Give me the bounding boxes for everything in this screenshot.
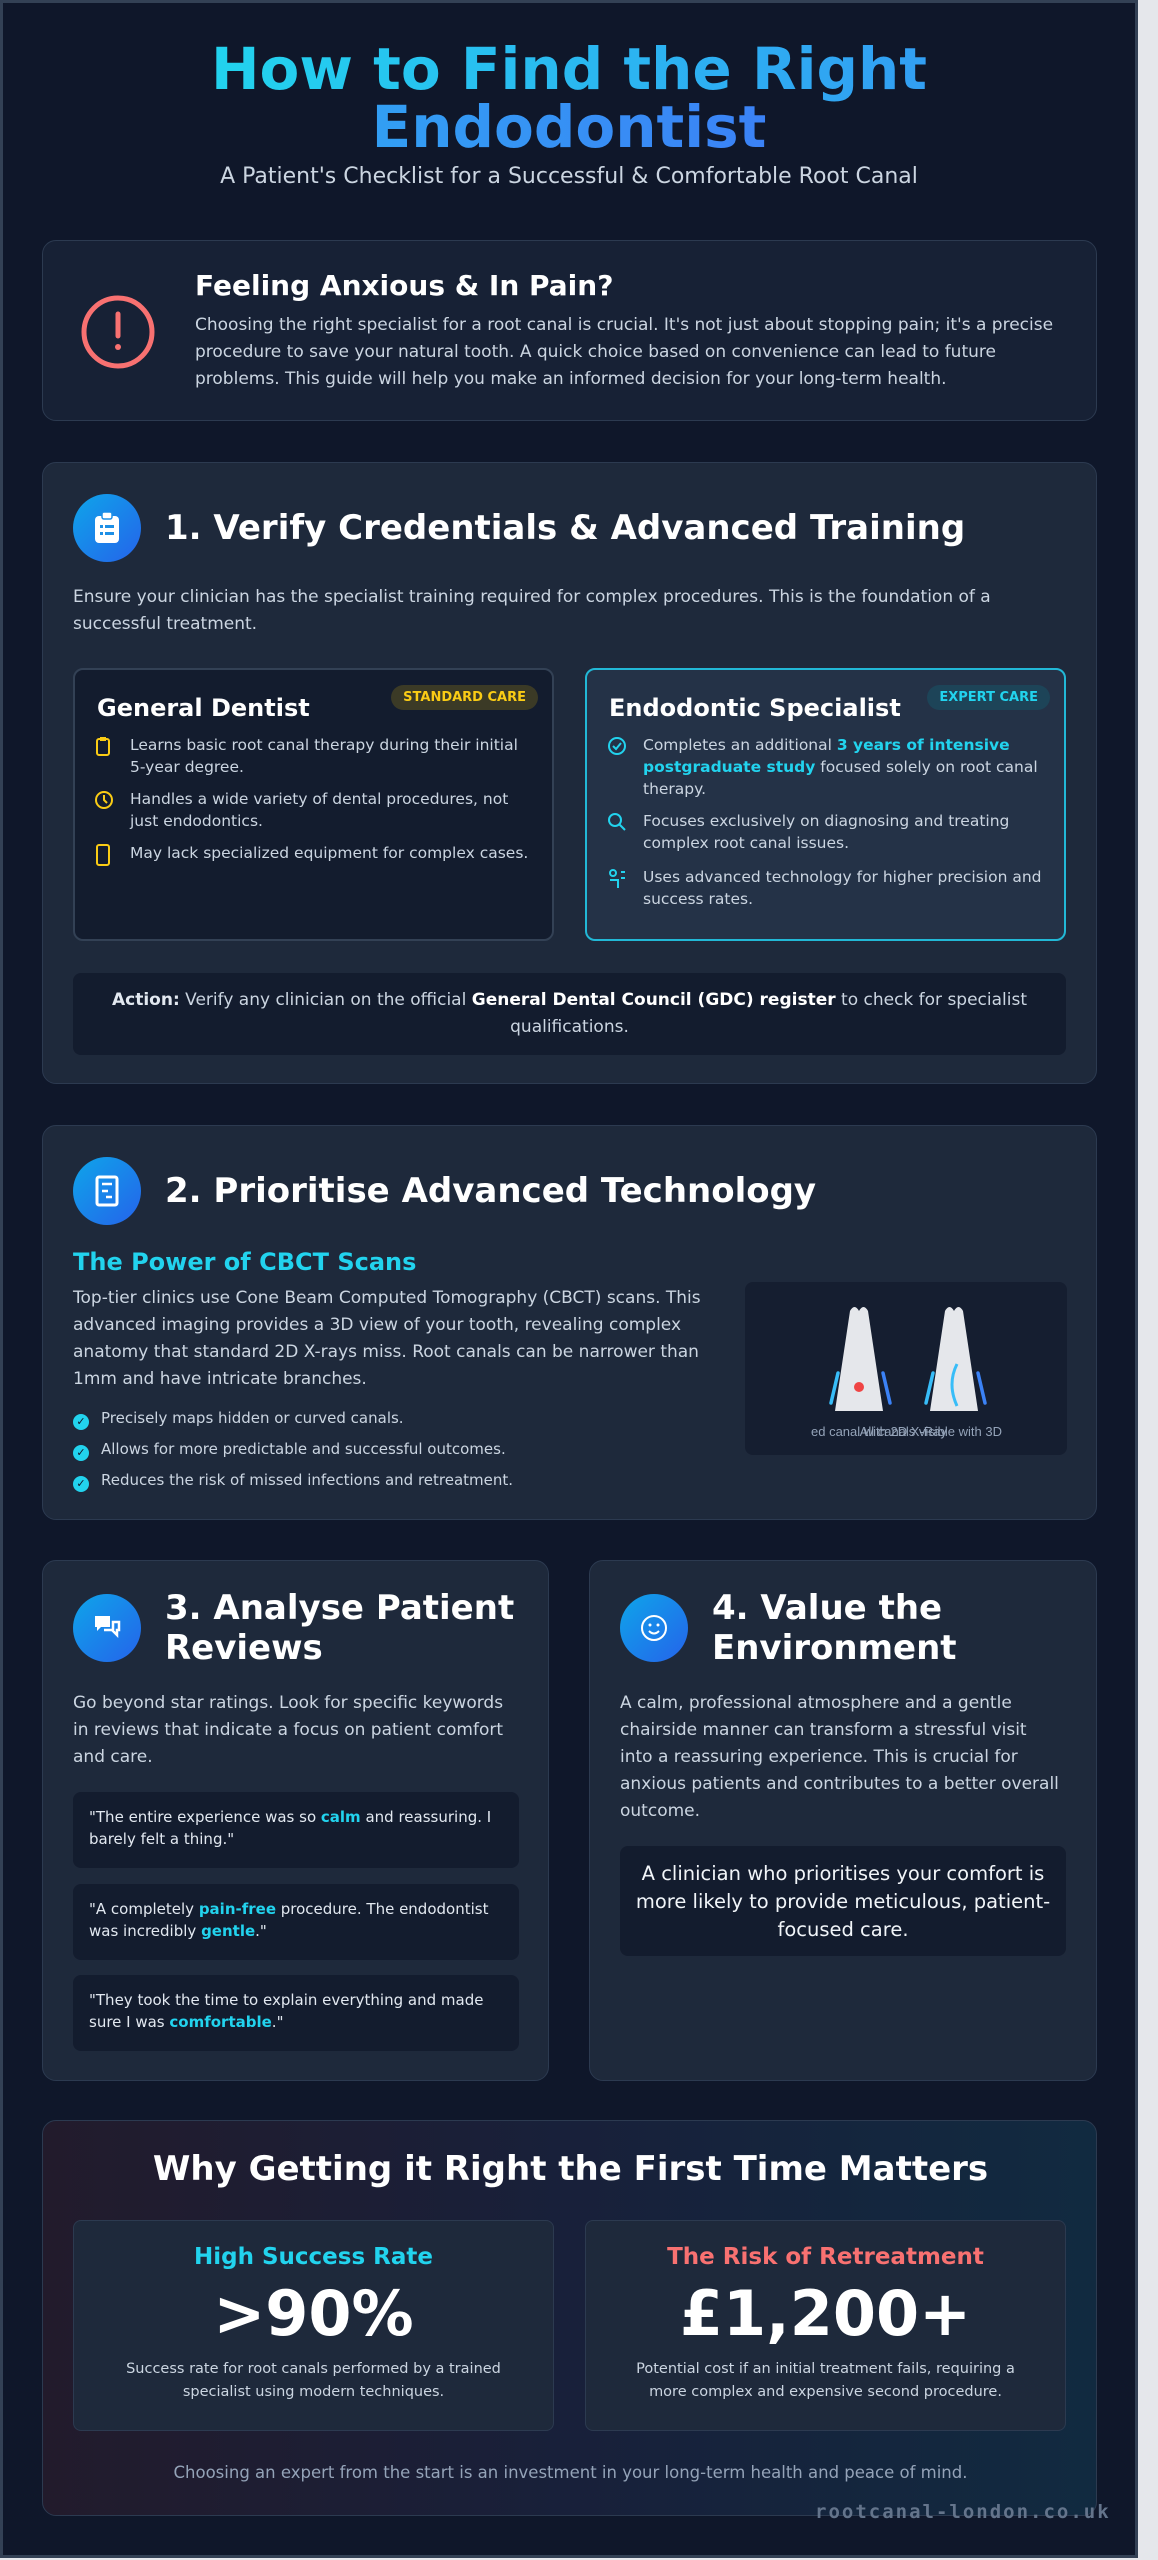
icon: clipboard bbox=[73, 494, 141, 562]
stat: success rate: High Success Rate bbox=[194, 2244, 433, 2270]
panel: general dentist bbox=[73, 668, 554, 941]
item: Focuses exclusively on diagnosing and treating complex root canal issues. bbox=[643, 812, 1009, 852]
quote: "The entire experience was so calm and reassuring. I barely felt a thing." bbox=[89, 1808, 491, 1848]
callout bbox=[620, 1846, 1066, 1956]
text block: A calm, professional atmosphere and a gentle chairside manner can transform a stressful visit bbox=[620, 1693, 1027, 1740]
stat: success rate: >90% bbox=[213, 2277, 414, 2350]
checklist: Reduces the risk of missed infections and retreatment. bbox=[101, 1471, 513, 1489]
checklist: ✓ bbox=[76, 1446, 86, 1459]
quote bbox=[73, 1792, 519, 1868]
item: Uses advanced technology for higher precision and success rates. bbox=[643, 868, 1042, 908]
text block: Top-tier clinics use Cone Beam Computed Tomography (CBCT) scans. This advanced imaging provides a 3D view of your tooth, revealing complex anatomy that standard 2D X-rays miss. Root canals can be narrower than 1mm and have intricate branches. bbox=[73, 1288, 701, 1389]
title: How to Find the Right bbox=[211, 35, 927, 103]
item: Handles a wide variety of dental procedures, not just endodontics. bbox=[130, 790, 508, 830]
stat: success rate: Success rate for root canals performed by a trained specialist using modern techniques. bbox=[126, 2361, 501, 2400]
text block bbox=[620, 1693, 1059, 1821]
badge: expert care bbox=[927, 685, 1050, 710]
panel: section 2 technology bbox=[42, 1125, 1097, 1520]
panel: section 3 reviews bbox=[42, 1560, 549, 2081]
quote: "They took the time to explain everything and made sure I was comfortable." bbox=[89, 1991, 483, 2031]
heading: 4. Value the Environment bbox=[712, 1588, 957, 1668]
text block: Choosing the right specialist for a root canal is crucial. It's not just about stopping pain; it's a precise procedure to save your natural tooth. A quick choice based on convenience can lead to future problems. This guide will help you make an informed decision for your long-term health. bbox=[195, 315, 1053, 389]
title bbox=[211, 35, 927, 161]
panel: endodontic specialist bbox=[585, 668, 1066, 941]
heading: 3. Analyse Patient Reviews bbox=[165, 1588, 514, 1668]
quote bbox=[73, 1884, 519, 1960]
subtitle: A Patient's Checklist for a Successful & Comfortable Root Canal bbox=[220, 164, 918, 189]
intro text: Ensure your clinician has the specialist training required for complex procedures. This is the foundation of a successful treatment. bbox=[73, 587, 991, 634]
text block: Go beyond star ratings. Look for specific keywords in reviews that indicate a focus on patient comfort and care. bbox=[73, 1693, 503, 1767]
chart: tooth comparison: ed canal with 2D X-Ray bbox=[811, 1424, 947, 1439]
stat: retreatment cost: Potential cost if an initial treatment fails, requiring a more complex and expensive second procedure. bbox=[636, 2361, 1015, 2400]
icon: smile bbox=[620, 1594, 688, 1662]
text block: anxious patients and contributes to a better overall outcome. bbox=[620, 1774, 1059, 1821]
badge: expert care: EXPERT CARE bbox=[939, 690, 1038, 705]
heading: Why Getting it Right the First Time Matters bbox=[153, 2149, 988, 2189]
stat: success rate bbox=[73, 2220, 554, 2431]
checklist bbox=[73, 1409, 513, 1492]
icon: tooth 3D bbox=[926, 1307, 985, 1411]
title: Endodontist bbox=[372, 93, 766, 161]
footer text: Choosing an expert from the start is an investment in your long-term health and peace of mind. bbox=[174, 2463, 967, 2482]
icon: tooth 2D bbox=[831, 1307, 890, 1411]
item: May lack specialized equipment for complex cases. bbox=[130, 844, 528, 862]
subheading: The Power of CBCT Scans bbox=[73, 1248, 416, 1276]
badge: standard care: STANDARD CARE bbox=[403, 690, 526, 705]
checklist: ✓ bbox=[76, 1477, 86, 1490]
item: Learns basic root canal therapy during their initial 5-year degree. bbox=[130, 736, 518, 776]
checklist: ✓ bbox=[76, 1415, 86, 1428]
panel: alert intro bbox=[42, 240, 1097, 421]
icon: chat bbox=[73, 1594, 141, 1662]
item: Completes an additional 3 years of intensive postgraduate study focused solely on root canal therapy. bbox=[643, 736, 1038, 798]
quote: "A completely pain-free procedure. The endodontist was incredibly gentle." bbox=[89, 1900, 488, 1940]
icon: scan bbox=[73, 1157, 141, 1225]
icon: alert bbox=[82, 296, 154, 368]
callout: action bbox=[73, 973, 1066, 1055]
chart: tooth comparison: All canals visible with 3D bbox=[860, 1424, 1002, 1439]
panel: section 1 credentials bbox=[42, 462, 1097, 1084]
checklist: Precisely maps hidden or curved canals. bbox=[101, 1409, 404, 1427]
heading: 2. Prioritise Advanced Technology bbox=[165, 1171, 816, 1211]
watermark: rootcanal-london.co.uk bbox=[815, 2501, 1111, 2523]
stat: retreatment cost: The Risk of Retreatment bbox=[667, 2244, 984, 2270]
heading: General Dentist bbox=[97, 694, 310, 722]
heading: 1. Verify Credentials & Advanced Training bbox=[165, 508, 965, 548]
text block: into a reassuring experience. This is crucial for bbox=[620, 1747, 1018, 1767]
stat: retreatment cost bbox=[585, 2220, 1066, 2431]
heading: Endodontic Specialist bbox=[609, 694, 901, 722]
badge: standard care bbox=[391, 685, 538, 710]
stat: retreatment cost: £1,200+ bbox=[680, 2277, 971, 2350]
callout: action: Action: Verify any clinician on the official General Dental Council (GDC) register to check for specialist qualifications. bbox=[112, 990, 1027, 1037]
checklist: Allows for more predictable and successful outcomes. bbox=[101, 1440, 506, 1458]
panel: why it matters bbox=[42, 2120, 1097, 2516]
panel: section 4 environment bbox=[589, 1560, 1097, 2081]
callout: A clinician who prioritises your comfort is more likely to provide meticulous, patient-focused care. bbox=[636, 1862, 1050, 1941]
chart: tooth comparison bbox=[745, 1282, 1067, 1455]
quote bbox=[73, 1975, 519, 2051]
heading: Feeling Anxious & In Pain? bbox=[195, 269, 613, 302]
